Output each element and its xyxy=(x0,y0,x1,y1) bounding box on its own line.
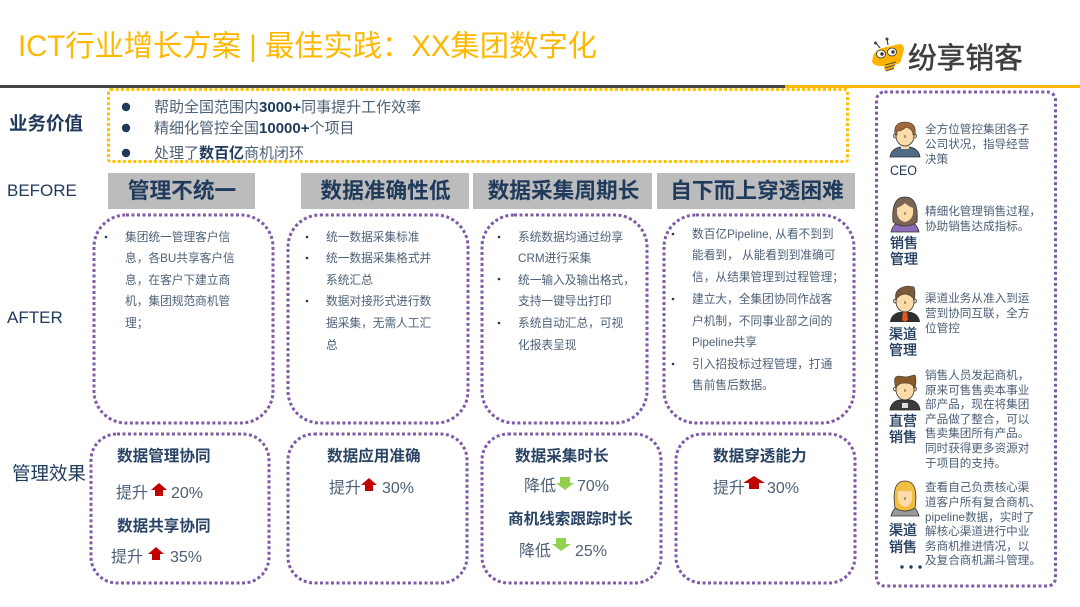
after panel 1: 理； xyxy=(125,317,148,330)
effect panel 2: 数据应用准确 xyxy=(327,446,421,465)
effect panel 3: 商机线索跟踪时长 xyxy=(508,509,633,528)
role: channel sales: 务商机推进情况，以 xyxy=(925,539,1030,553)
effect panel 1: 35% xyxy=(170,549,202,566)
effect panel 3 xyxy=(482,434,661,583)
label: before: BEFORE xyxy=(7,181,77,200)
role: direct sales: 于项目的支持。 xyxy=(925,456,1006,470)
header rule xyxy=(0,85,1080,88)
role: channel management: 位管控 xyxy=(925,321,960,335)
effect panel 4: 数据穿透能力 xyxy=(713,446,807,465)
role: CEO xyxy=(890,122,1030,178)
icon: CEO avatar xyxy=(890,122,920,157)
effect panel 3: 降低 xyxy=(524,477,556,495)
effect panel 2: 提升 xyxy=(329,479,361,497)
role: sales management: 精细化管理销售过程， xyxy=(925,204,1041,218)
panel: roles xyxy=(876,92,1056,586)
role: direct sales: 直营 xyxy=(889,413,917,429)
bullet 1: 帮助全国范围内3000+同事提升工作效率 xyxy=(154,98,421,116)
effect panel 4: 30% xyxy=(767,480,799,497)
effect panel 2 xyxy=(288,434,467,583)
after panel 3: 化报表呈现 xyxy=(518,338,577,352)
role: sales management: 销售 xyxy=(890,235,918,251)
after panel 2: 统一数据采集格式并 xyxy=(326,251,432,265)
role: channel management: 管理 xyxy=(889,342,917,358)
after panel 4: 能看到， 从能看到到准确可 xyxy=(692,248,836,262)
role: sales management xyxy=(890,197,1041,267)
role: direct sales: 部产品，现在将集团 xyxy=(925,397,1029,411)
before header 3: 数据采集周期长 xyxy=(488,178,640,203)
role: CEO: CEO xyxy=(890,163,917,178)
after panel 1: 息，在客户下建立商 xyxy=(125,273,230,287)
effect panel 1: 20% xyxy=(171,485,203,502)
logo wordmark: 纷享销客 xyxy=(908,43,1023,75)
role: channel sales: pipeline数据，实时了 xyxy=(925,510,1035,524)
after panel 1 xyxy=(94,215,273,423)
role: CEO: 全方位管控集团各子 xyxy=(925,122,1030,136)
role: direct sales: 销售人员发起商机， xyxy=(925,368,1029,382)
icon: bee mascot xyxy=(872,38,904,71)
effect panel 3: 25% xyxy=(575,543,607,560)
after panel 4: 引入招投标过程管理，打通 xyxy=(692,357,833,371)
effect panel 1 xyxy=(91,434,269,583)
panel: business value xyxy=(108,90,848,162)
role: channel management: 渠道业务从准入到运 xyxy=(925,291,1030,305)
role: channel management: 营到协同互联，全方 xyxy=(925,306,1029,320)
role: channel sales: 渠道 xyxy=(889,522,917,538)
after panel 4: 户机制，不同事业部之间的 xyxy=(692,314,832,328)
effect panel 3: 降低 xyxy=(519,542,551,560)
effect panel 4 xyxy=(676,434,855,583)
role: sales management: 协助销售达成指标。 xyxy=(925,219,1029,233)
after panel 1: 集团统一管理客户信 xyxy=(125,230,231,244)
after panel 4 xyxy=(664,215,854,423)
after panel 2: 总 xyxy=(326,338,338,352)
effect panel 1: 数据管理协同 xyxy=(117,446,211,465)
after panel 4: 建立大，全集团协同作战客 xyxy=(692,292,833,306)
role: channel management: 渠道 xyxy=(889,326,917,342)
effect panel 3: 数据采集时长 xyxy=(515,446,609,465)
label: business value: 业务价值 xyxy=(9,113,83,134)
role: direct sales: 原来可售售卖本事业 xyxy=(925,383,1029,397)
after panel 1: 机，集团规范商机管 xyxy=(125,294,230,308)
after panel 4: Pipeline共享 xyxy=(692,335,757,349)
logo xyxy=(872,38,1023,75)
after panel 2: 系统汇总 xyxy=(326,273,373,287)
effect panel 1: 数据共享协同 xyxy=(117,516,211,535)
title: ICT行业增长方案 | 最佳实践：XX集团数字化 xyxy=(18,30,597,63)
after panel 4: 数百亿Pipeline, 从看不到到 xyxy=(692,227,834,241)
role: channel sales: 及复合商机漏斗管理。 xyxy=(925,553,1041,567)
role: CEO: 决策 xyxy=(925,152,949,166)
role: channel sales: 道客户所有复合商机、 xyxy=(925,495,1041,509)
effect panel 3: 70% xyxy=(577,478,609,495)
role: channel management xyxy=(889,286,1030,358)
before header 4: 自下而上穿透困难 xyxy=(670,178,844,203)
icon: sales manager avatar xyxy=(891,197,919,232)
before header 2: 数据准确性低 xyxy=(320,178,451,203)
after panel 2: 数据对接形式进行数 xyxy=(326,294,432,308)
after panel 2 xyxy=(288,215,468,423)
role: direct sales: 产品做了整合，可以 xyxy=(925,412,1030,426)
role: direct sales: 售卖集团所有产品。 xyxy=(925,426,1029,440)
bullet 3: 处理了数百亿商机闭环 xyxy=(154,145,304,162)
after panel 3: 支持一键导出打印 xyxy=(518,294,612,308)
bullet 2: 精细化管控全国10000+个项目 xyxy=(154,119,355,137)
role: channel sales xyxy=(889,480,1041,569)
effect panel 1: 提升 xyxy=(116,484,148,502)
icon: direct sales avatar xyxy=(890,375,920,410)
label: management effect: 管理效果 xyxy=(12,463,86,484)
icon: channel sales avatar xyxy=(891,481,919,516)
after panel 2: 据采集，无需人工汇 xyxy=(326,316,432,330)
after panel 3 xyxy=(482,215,647,423)
label: after: AFTER xyxy=(7,308,63,327)
after panel 3: 系统自动汇总，可视 xyxy=(518,316,624,330)
before header 1: 管理不统一 xyxy=(128,178,236,203)
effect panel 2: 30% xyxy=(382,480,414,497)
after panel 3: 系统数据均通过纷享 xyxy=(518,230,624,244)
role: direct sales: 同时获得更多资源对 xyxy=(925,441,1030,455)
before header 4 xyxy=(657,173,855,209)
before header 1 xyxy=(108,173,255,209)
role: direct sales: 销售 xyxy=(889,429,917,445)
effect panel 1: 提升 xyxy=(111,548,143,566)
after panel 3: CRM进行采集 xyxy=(518,251,592,265)
role: channel sales: 查看自己负责核心渠 xyxy=(925,480,1030,494)
before header 3 xyxy=(473,173,652,209)
role: channel sales: 解核心渠道进行中业 xyxy=(925,524,1029,538)
role: sales management: 管理 xyxy=(890,251,918,267)
before header 2 xyxy=(301,173,469,209)
effect panel 4: 提升 xyxy=(713,479,745,497)
after panel 4: 信，从结果管理到过程管理； xyxy=(692,270,844,284)
role: channel sales: 销售 xyxy=(889,539,917,555)
role: direct sales xyxy=(889,368,1030,470)
icon: channel manager avatar xyxy=(890,286,920,322)
after panel 2: 统一数据采集标准 xyxy=(326,230,420,244)
ellipsis dots xyxy=(900,565,922,569)
after panel 3: 统一输入及输出格式， xyxy=(518,273,635,287)
after panel 1: 息，各BU共享客户信 xyxy=(125,251,235,265)
role: CEO: 公司状况，指导经营 xyxy=(925,137,1029,151)
after panel 4: 售前售后数据。 xyxy=(692,378,774,392)
